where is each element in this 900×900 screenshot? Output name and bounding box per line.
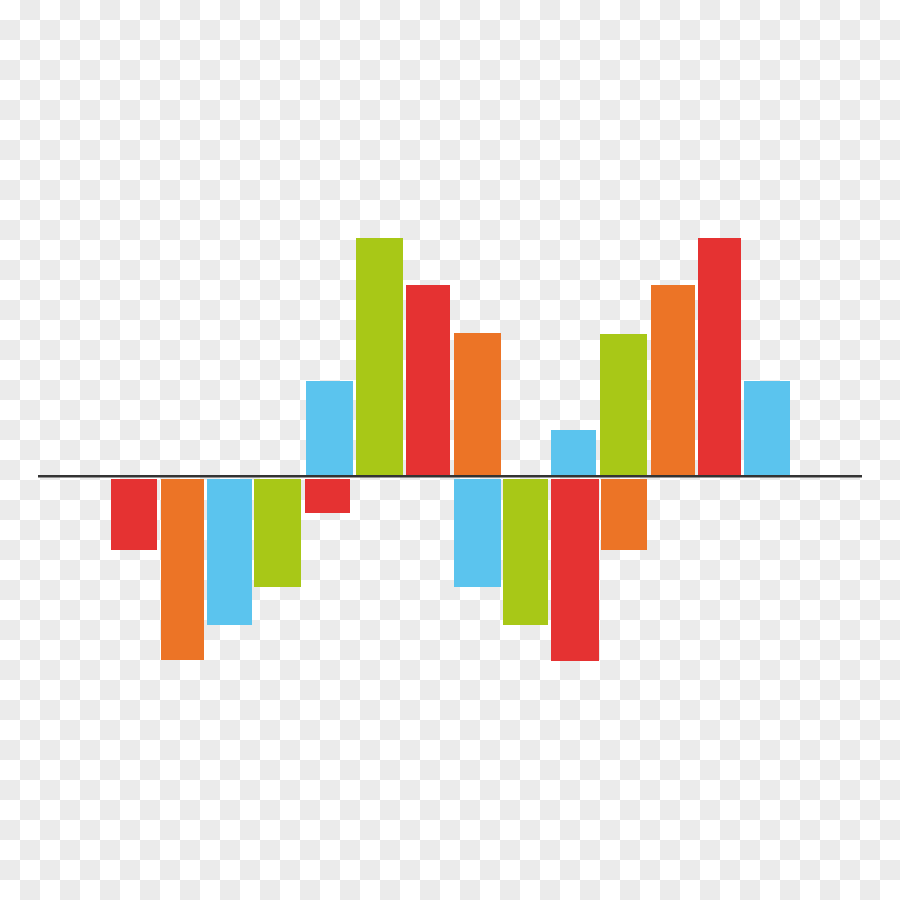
bars below axis group 2	[454, 479, 647, 661]
bars above axis group 1	[306, 238, 501, 475]
bars below axis group 1	[111, 479, 350, 660]
bars above axis group 2	[551, 238, 790, 475]
axis line	[38, 475, 862, 478]
